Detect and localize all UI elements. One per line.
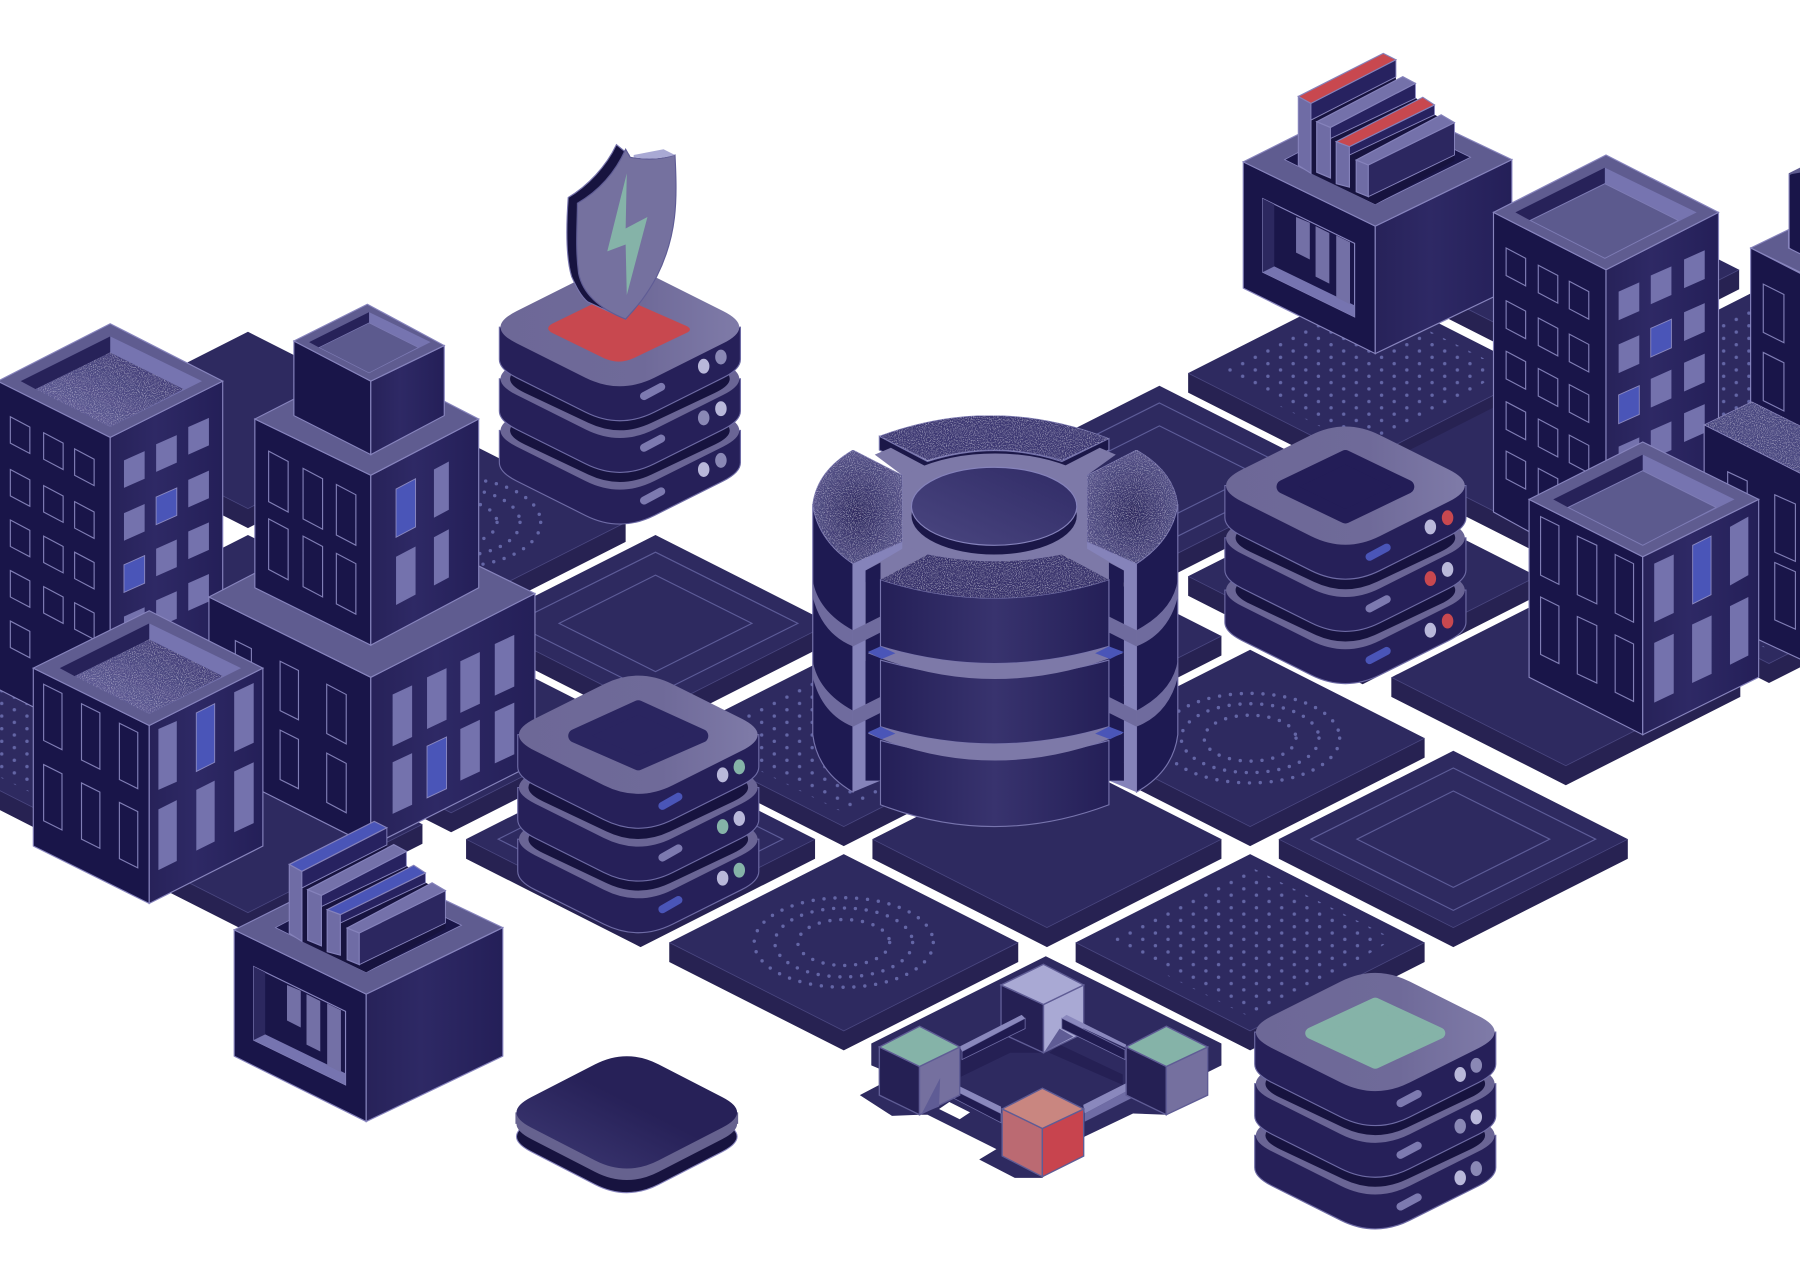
building: left tall tower <box>0 324 223 746</box>
cube: right green <box>1126 1026 1208 1115</box>
tile: back left <box>73 332 422 528</box>
building: right tall tower <box>1493 155 1718 574</box>
database: cross band <box>855 448 1136 585</box>
tile: dotted left of database <box>669 650 1018 846</box>
building: front left <box>33 611 263 903</box>
tile: dot ring behind server <box>277 434 626 630</box>
tile: far right dotted <box>1593 285 1800 481</box>
database: upper band with blue joints <box>868 646 1124 679</box>
icon: crate with blue folders <box>234 821 503 1122</box>
tile: under right server <box>1188 488 1537 684</box>
building: roof box <box>294 304 444 455</box>
tile: behind base building <box>277 636 626 832</box>
tile: left under building <box>73 736 422 932</box>
cubes: base tile and shadows <box>860 956 1221 1178</box>
tile: dotted front <box>1076 854 1425 1050</box>
tile: dot ring front <box>669 854 1018 1050</box>
tile: far left dotted <box>0 637 220 833</box>
tile: under database back <box>872 548 1221 744</box>
network of four cubes on a tile <box>860 956 1221 1178</box>
tile: left hidden behind buildings <box>73 535 422 731</box>
database: left column <box>813 450 902 792</box>
database: back ring segment <box>879 416 1109 473</box>
building: far right tower <box>1704 166 1800 660</box>
tile: crate base dotted <box>1188 285 1537 481</box>
tile: under database front <box>872 751 1221 947</box>
cube: back lilac <box>1001 964 1084 1053</box>
database: right column <box>1087 450 1178 792</box>
database: top layer <box>880 554 1109 664</box>
icon: server stack with green top <box>1255 973 1496 1229</box>
tile: far right lower <box>1595 487 1800 683</box>
floor: isometric tiles <box>0 181 1800 1050</box>
cube: front red <box>1002 1088 1084 1177</box>
tile: back right <box>1390 181 1739 378</box>
tile: squares right <box>1279 751 1628 947</box>
icon: lone flat pad <box>515 1056 738 1193</box>
building: far right lower block <box>1704 402 1800 660</box>
icon: shield with lightning bolt <box>567 145 676 319</box>
building: wide base block <box>209 513 535 846</box>
tile: dot ring right of database <box>1076 650 1425 846</box>
cube: left green <box>879 1026 960 1115</box>
database cylinder <box>813 416 1178 827</box>
icon: crate with red folders <box>1243 53 1512 354</box>
database: middle layer <box>880 660 1109 744</box>
tile: squares upper <box>481 535 830 731</box>
tile: right front <box>1391 589 1740 785</box>
database: bottom layer <box>880 740 1109 827</box>
database: centre disc <box>911 467 1077 554</box>
icon: server stack with dark hole, green lights <box>518 676 759 933</box>
icon: server stack with dark hole, red lights <box>1225 426 1466 684</box>
building: right front <box>1529 442 1759 735</box>
icon: stacked server with red top <box>499 268 740 524</box>
connector bars <box>937 1015 1148 1123</box>
tile: squares under server <box>466 751 815 947</box>
building: mid tower with roof box <box>255 304 479 645</box>
database: lower band with blue joints <box>868 727 1124 761</box>
tile: mid right <box>1391 371 1740 567</box>
tile: back centre squares <box>985 386 1334 582</box>
